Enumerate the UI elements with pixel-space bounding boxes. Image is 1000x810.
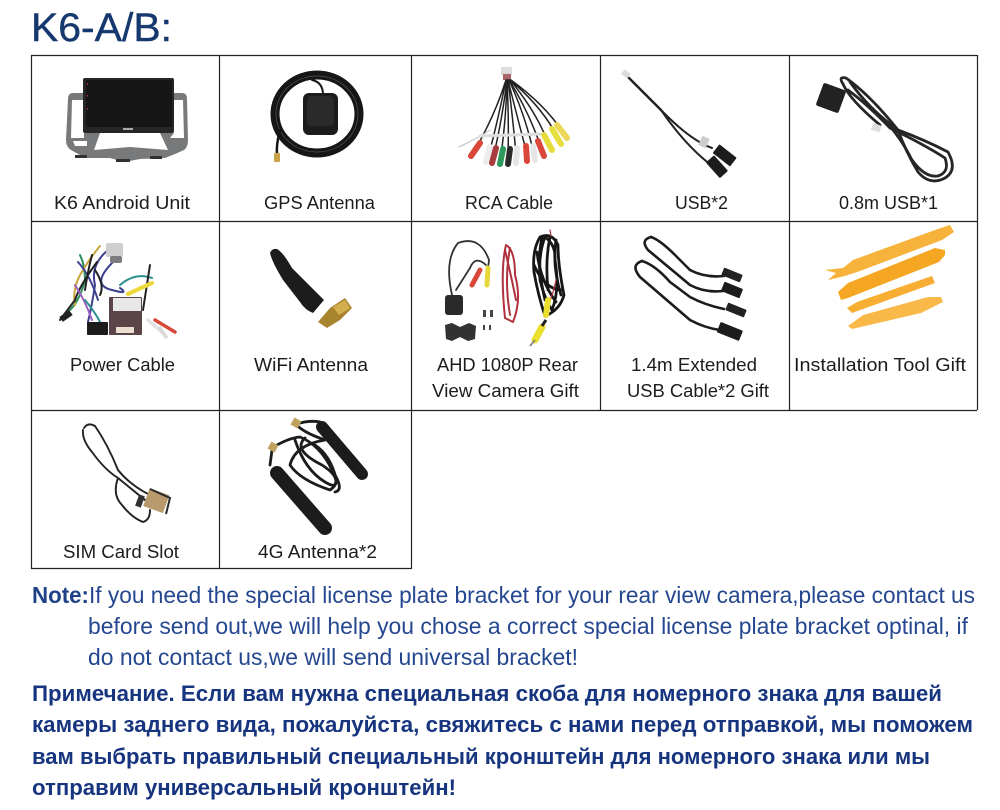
cell: GPS Antenna [264,75,376,213]
cell: AHD 1080P Rear View Camera Gift [432,230,579,401]
label: RCA Cable [465,193,553,213]
note: English: do not contact us,we will send universal bracket! [88,644,578,670]
icon: dual USB cable [621,69,737,178]
note: Russian: камеры заднего вида, пожалуйста, свяжитесь с нами перед отправкой, мы поможем [32,712,973,737]
cell: USB*2 [621,69,737,213]
icon: GPS antenna with coiled cable [274,75,359,162]
cell: 1.4m Extended USB Cable*2 Gift [627,237,769,401]
cell: SIM Card Slot [63,424,179,562]
cell: 4G Antenna*2 [258,418,377,562]
icon: orange pry tools [825,225,954,329]
label: SIM Card Slot [63,542,179,562]
title: K6-A/B: [31,6,172,50]
label: Installation Tool Gift [794,355,966,375]
note: Russian: Примечание. Если вам нужна специальная скоба для номерного знака для вашей [32,681,942,706]
cell: AHD 1080P Rear View Camera Gift: View Camera Gift [432,381,579,401]
note: English: Note: [32,582,89,608]
parts table [31,55,978,569]
note: Russian [32,681,973,800]
label: 1.4m Extended [631,355,757,375]
cell: 0.8m USB*1 [816,78,952,213]
icon: android head unit [66,78,188,162]
icon: coiled USB cable [816,78,952,181]
label: 4G Antenna*2 [258,542,377,562]
label: GPS Antenna [264,193,376,213]
label: WiFi Antenna [254,355,369,375]
note: Russian: вам выбрать правильный специальный кронштейн для номерного знака или мы [32,744,930,769]
icon: extension USB cables [635,237,747,341]
icon: power harness [59,243,175,337]
note: English [32,582,975,670]
cell: WiFi Antenna [254,249,369,375]
note: Russian: отправим универсальный кронштейн! [32,775,456,800]
icon: SIM card slot cable [83,424,170,522]
icon: WiFi antenna [270,249,352,328]
icon: RCA cable fan [459,67,567,164]
label: K6 Android Unit [54,193,190,213]
cell: RCA Cable [459,67,567,213]
label: 0.8m USB*1 [839,193,938,213]
note: English: before send out,we will help you chose a correct special license plate bracket optinal, if [88,613,969,639]
cell: 1.4m Extended USB Cable*2 Gift: USB Cable*2 Gift [627,381,769,401]
icon: 4G antennas with cables [268,418,362,528]
cell: Installation Tool Gift [794,225,966,375]
label: AHD 1080P Rear [437,355,578,375]
cell: K6 Android Unit [54,78,190,213]
label: USB*2 [675,193,728,213]
note: English: If you need the special license plate bracket for your rear view camera,please contact us [89,582,975,608]
cell: Power Cable [59,243,175,375]
label: Power Cable [70,355,175,375]
icon: rear view camera kit [445,230,564,346]
